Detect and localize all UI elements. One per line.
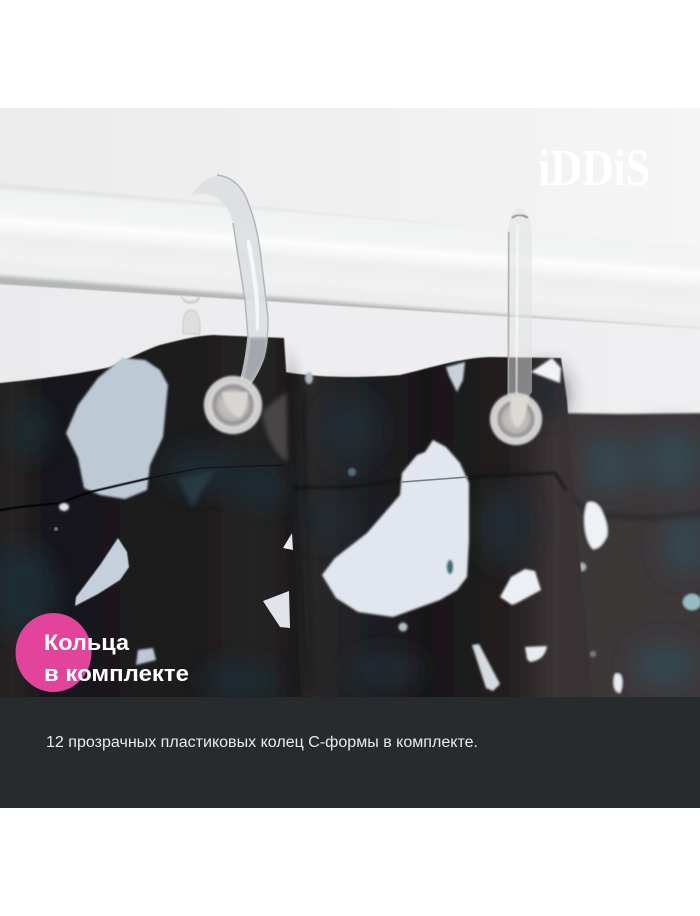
half chip	[525, 646, 547, 662]
edge chip	[283, 533, 293, 550]
hidden ring ends behind rod	[181, 297, 200, 334]
badge heading line 2: в комплекте	[44, 661, 189, 686]
shadow between folds	[287, 345, 314, 697]
blurred teal spots	[584, 430, 700, 687]
brand logo: iDDiS	[538, 140, 650, 197]
gray disk print	[262, 392, 288, 462]
stitch across chip	[402, 477, 468, 482]
large white terrazzo chip	[322, 440, 469, 617]
ring 2	[490, 207, 542, 445]
large pale terrazzo chip	[66, 358, 168, 499]
white chip	[584, 502, 607, 549]
middle curtain fold	[285, 357, 595, 720]
badge heading: Кольца	[44, 630, 129, 655]
grommet 1	[204, 376, 262, 434]
stitch line	[568, 495, 700, 518]
bottom chip	[136, 648, 156, 665]
grommet 2	[490, 393, 542, 445]
top chips	[446, 362, 465, 392]
wall above rod	[0, 108, 700, 248]
teal triangle	[178, 471, 213, 507]
stitch line	[290, 473, 566, 490]
narrow chip	[472, 644, 500, 691]
teal shading	[0, 400, 288, 698]
teal speck on chip	[447, 560, 453, 574]
white quad chip	[263, 591, 290, 628]
white chip	[500, 569, 541, 605]
tapered chip	[75, 538, 129, 606]
small chip	[578, 563, 586, 571]
photo: curtain on rod	[0, 108, 700, 720]
front curtain fold	[0, 335, 302, 720]
wall below rod	[0, 280, 700, 420]
dark teal shading	[299, 370, 563, 688]
ring 1	[192, 175, 268, 434]
ring lower section over curtain	[242, 338, 267, 386]
bottom chip	[614, 674, 622, 693]
small chip	[59, 503, 69, 511]
pink badge circle	[16, 613, 92, 692]
stitch line	[0, 478, 150, 511]
caption band	[0, 697, 700, 808]
curtain rod	[0, 181, 700, 330]
teal chip	[683, 594, 700, 610]
infographic	[0, 108, 700, 808]
back curtain fold (right)	[567, 411, 700, 697]
caption text: 12 прозрачных пластиковых колец С-формы в комплекте.	[46, 734, 478, 751]
speck	[398, 622, 408, 632]
